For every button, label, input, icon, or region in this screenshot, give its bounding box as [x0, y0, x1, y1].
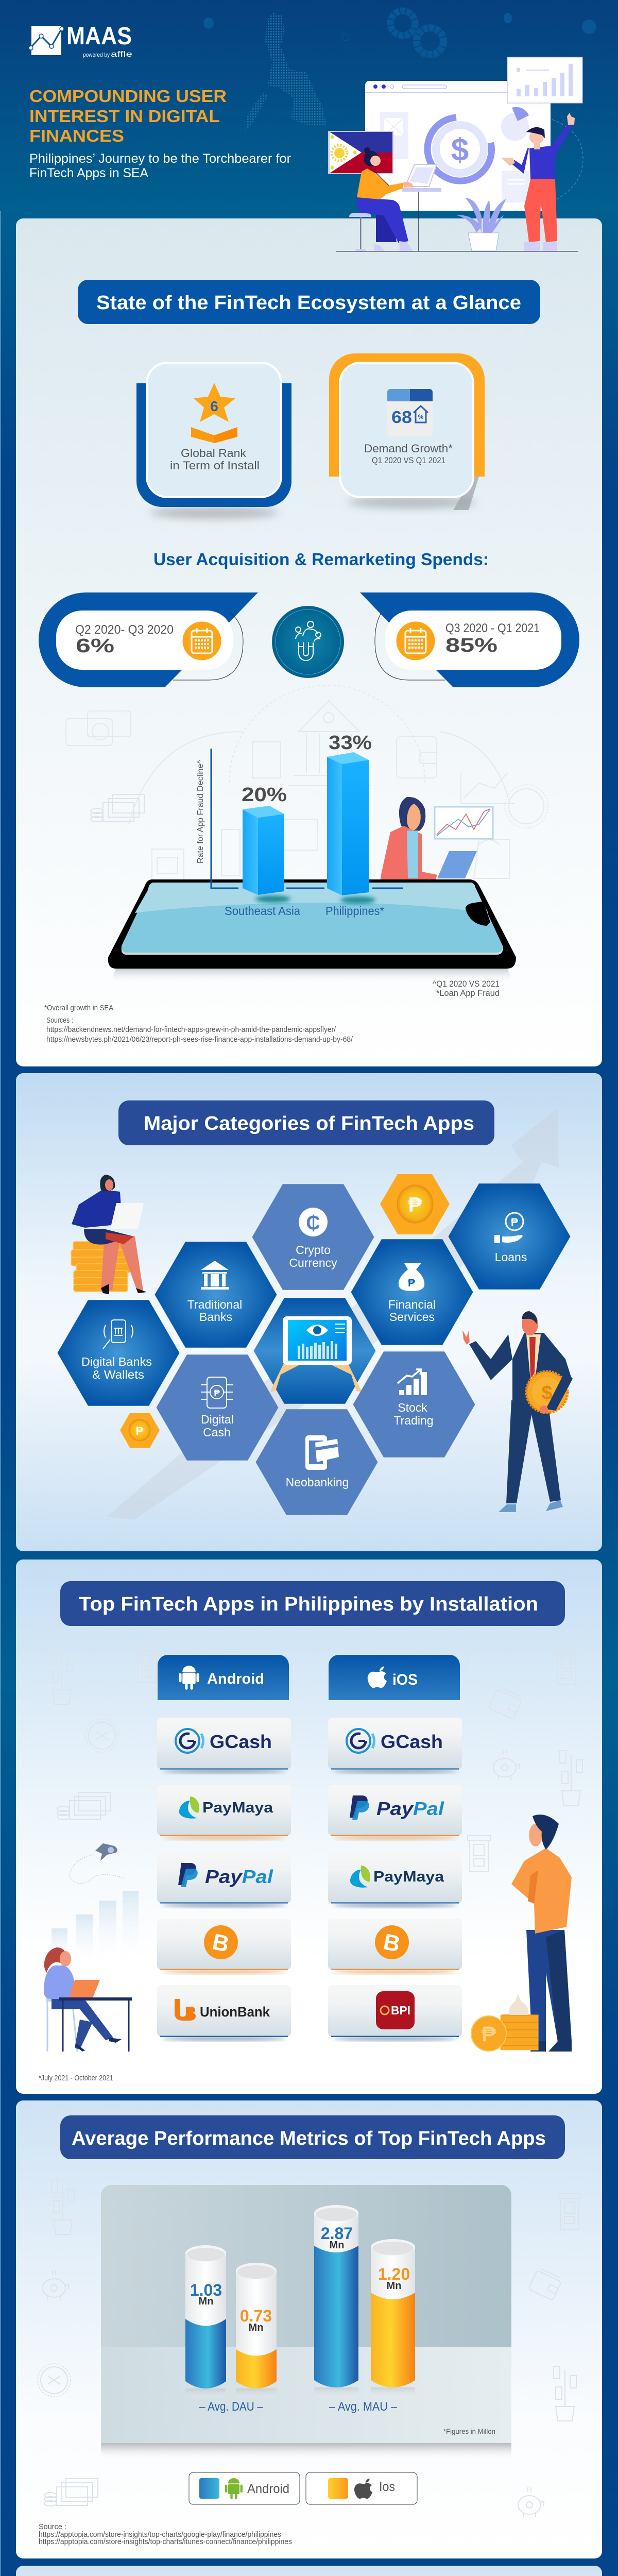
cylinder chart: – Avg. MAU –: [329, 2400, 398, 2414]
app card: GCash iOS: [328, 1718, 462, 1773]
heading: Top FinTech Apps in Philippines by Installation: [79, 1594, 538, 1615]
stat card: global rank: in Term of Install: [170, 459, 260, 472]
hexagon: financial services: ₱: [408, 1277, 415, 1289]
hexagon: neobanking: [255, 1409, 378, 1515]
decorative growth arrow: [107, 1108, 559, 1520]
stat card: global rank: [136, 363, 291, 519]
sources: https://newsbytes.ph/2021/06/23/report-ph-sees-rise-finance-app-installations-demand-up-by-68/: [46, 1036, 353, 1044]
presenting man: [501, 113, 575, 251]
legend: [189, 2472, 417, 2504]
hexagon: peso coin large: ₱: [408, 1194, 422, 1216]
hexagon: crypto currency: Crypto: [296, 1243, 331, 1257]
faint finance line art: [66, 685, 548, 880]
cylinder: DAU Android: Mn: [199, 2296, 213, 2307]
callout: Q3 2020 to Q1 2021 spend: 85%: [445, 635, 497, 656]
Philippine flag: [328, 131, 393, 174]
title: COMPOUNDING USER: [29, 87, 227, 106]
cylinder: DAU iOS: Mn: [249, 2322, 263, 2333]
browser window: [365, 81, 551, 211]
stat card: demand growth: [329, 353, 485, 510]
bar chart: fraud decline: Southeast Asia: [225, 904, 300, 918]
woman on coin stack: [71, 1175, 147, 1294]
axis label: Rate for App Fraud Decline^: [196, 760, 205, 863]
app card: GCash Android: [157, 1718, 291, 1773]
businessman with coin: [462, 1311, 573, 1512]
legend: Android: Android: [247, 2482, 289, 2496]
businessman with coin: $: [541, 1382, 553, 1404]
title: INTEREST IN DIGITAL: [29, 107, 220, 126]
app card: Bitcoin iOS: B: [381, 1929, 402, 1957]
axis lines: [211, 749, 403, 888]
hexagon: stock trading: Trading: [393, 1414, 434, 1427]
bar chart: fraud decline: 20%: [242, 784, 287, 806]
sources: [39, 2523, 292, 2546]
icon: calendar 68%: 68: [391, 408, 412, 427]
app card: PayPal Android: [157, 1852, 291, 1907]
callout: Q3 2020 to Q1 2021 spend: [360, 592, 579, 687]
hexagon: neobanking: Neobanking: [286, 1476, 349, 1489]
panel: top FinTech apps: [16, 1560, 602, 2094]
cylinder: DAU Android: 1.03: [190, 2281, 222, 2299]
title: FINANCES: [29, 126, 124, 145]
sources: Sources :: [46, 1016, 73, 1025]
logo: powered by: [83, 52, 110, 58]
hexagon: crypto currency: [252, 1184, 374, 1290]
hexagon: traditional banks: [154, 1242, 277, 1348]
man with peso coins: ₱: [482, 2022, 496, 2046]
bar chart: fraud decline: 33%: [329, 732, 372, 754]
hexagon: stock trading: Stock: [398, 1401, 427, 1414]
subtitle: FinTech Apps in SEA: [29, 166, 148, 180]
app card: Bitcoin Android: [157, 1919, 291, 1974]
bar chart card: [507, 57, 582, 103]
app card: UnionBank Android: [157, 1985, 291, 2041]
hexagon: digital cash: Cash: [203, 1426, 231, 1439]
panel: growth projection: [16, 2566, 602, 2576]
hexagon: loans: [448, 1183, 571, 1290]
browser window: $: [451, 132, 469, 168]
logo: [29, 23, 132, 59]
sources: https://backendnews.net/demand-for-fintech-apps-grew-in-ph-amid-the-pandemic-appsflyer/: [46, 1026, 336, 1034]
app card: PayPal iOS: PayPal: [376, 1798, 444, 1819]
heading: Average Performance Metrics of Top FinTech Apps: [72, 2128, 546, 2149]
app card: GCash iOS: GCash: [381, 1731, 443, 1752]
hexagon: traditional banks: Traditional: [187, 1298, 242, 1311]
hexagon: centre tablet with hands: [253, 1298, 376, 1404]
callout: Q2 to Q3 2020 spend: [39, 592, 258, 687]
cylinder chart: *Figures in Millon: [443, 2427, 495, 2435]
cylinder: DAU iOS: [236, 2263, 277, 2388]
stat card: demand growth: Demand Growth*: [364, 442, 453, 455]
chart notes: ^Q1 2020 VS 2021: [433, 979, 500, 989]
app card: Bitcoin iOS: [328, 1919, 462, 1974]
column header: Android: [158, 1655, 289, 1700]
header illustration: [328, 57, 583, 252]
hexagon: crypto currency: Currency: [289, 1256, 337, 1269]
bar chart: fraud decline: [108, 732, 516, 998]
app card: PayMaya iOS: PayMaya: [373, 1869, 444, 1885]
sources: [44, 1004, 353, 1044]
panel: average performance metrics: [16, 2100, 602, 2558]
seated woman at desk: [349, 147, 441, 252]
background map of the Philippines: [245, 13, 327, 131]
icon: calendar 68%: %: [418, 413, 424, 420]
column header: Android: Android: [207, 1671, 264, 1687]
logo: affle: [111, 50, 132, 59]
heading: Major Categories of FinTech Apps: [144, 1113, 474, 1134]
stat card: demand growth: Q1 2020 VS Q1 2021: [372, 456, 445, 465]
subtitle: Philippines’ Journey to be the Torchbearer for: [29, 151, 291, 166]
column header: iOS: [329, 1655, 460, 1700]
app card: PayMaya iOS: [328, 1852, 462, 1907]
cylinder: DAU iOS: 0.73: [240, 2307, 272, 2325]
column header: iOS: iOS: [392, 1671, 418, 1688]
heading: [78, 280, 540, 324]
app card: PayPal iOS: [328, 1785, 462, 1840]
callout: Q3 2020 to Q1 2021 spend: Q3 2020 - Q1 2021: [445, 621, 540, 635]
hexagon: crypto currency: ₵: [306, 1212, 320, 1234]
cylinder: MAU iOS: [371, 2239, 415, 2387]
cylinder: MAU Android: 2.87: [321, 2224, 353, 2243]
heading: [118, 1100, 494, 1145]
hexagon: loans: ₱: [511, 1216, 518, 1228]
subtitle: [29, 151, 291, 180]
hexagon: financial services: Financial: [388, 1298, 436, 1311]
hexagon: stock trading: [353, 1351, 475, 1458]
app card: UnionBank Android: UnionBank: [200, 2004, 270, 2020]
icon: star rank 6: [191, 383, 237, 443]
legend: Android: [189, 2472, 300, 2504]
hexagon: financial services: [351, 1239, 473, 1345]
cylinder: MAU Android: [314, 2205, 358, 2387]
chart notes: *Loan App Fraud: [436, 988, 500, 998]
stat card: global rank: Global Rank: [181, 447, 247, 460]
callout: Q2 to Q3 2020 spend: Q2 2020- Q3 2020: [75, 623, 174, 637]
icon: magnet attracting users: [272, 606, 344, 678]
hexagon: small peso coin: ₱: [136, 1425, 144, 1437]
man with peso coins: [471, 1815, 572, 2052]
hexagon: digital banks and wallets: [58, 1300, 179, 1406]
cylinder chart: – Avg. DAU –: [199, 2400, 264, 2414]
title: [29, 87, 227, 145]
hexagon: small peso coin: [120, 1413, 160, 1448]
app card: PayMaya Android: [157, 1785, 291, 1840]
icon: star rank 6: 6: [210, 398, 218, 414]
subheading: user acquisition and remarketing: User Acquisition & Remarketing Spends:: [153, 550, 489, 569]
app card: BPI iOS: [328, 1985, 462, 2041]
cylinder chart: [101, 2185, 511, 2460]
app card: BPI iOS: BPI: [391, 2004, 410, 2017]
heading: State of the FinTech Ecosystem at a Glance: [96, 292, 521, 314]
app card: Bitcoin Android: B: [210, 1929, 231, 1957]
decorative gears and dots: [203, 11, 596, 181]
hexagon: digital cash: [157, 1354, 278, 1461]
chart notes: [433, 979, 500, 998]
hexagon: digital banks and wallets: Digital Banks: [81, 1355, 152, 1368]
phone base: [108, 879, 516, 983]
woman with laptop and growth bars: [44, 1843, 139, 2052]
bar chart: fraud decline: Philippines*: [325, 904, 384, 918]
potted plant: [457, 198, 506, 251]
date note: *July 2021 - October 2021: [39, 2074, 113, 2082]
bar: Southeast Asia: [243, 806, 290, 903]
hexagon: digital cash: ₱: [214, 1388, 220, 1398]
sources: Source :: [39, 2523, 66, 2531]
hexagon: digital banks and wallets: & Wallets: [92, 1368, 144, 1381]
sources: https://apptopia.com/store-insights/top-charts/google-play/finance/philippines: [39, 2531, 281, 2539]
cylinder: MAU iOS: Mn: [387, 2280, 401, 2292]
sources: https://apptopia.com/store-insights/top-charts/itunes-connect/finance/philippines: [39, 2538, 292, 2546]
heading: [60, 2115, 565, 2159]
app card: PayPal Android: PayPal: [205, 1866, 273, 1887]
icon: calendar 68%: [387, 389, 433, 436]
heading: [60, 1581, 565, 1626]
panel: state of the FinTech ecosystem: [16, 218, 602, 1066]
hexagon: traditional banks: Banks: [199, 1310, 232, 1324]
bar: Philippines: [327, 752, 375, 904]
hexagon: peso coin large: [380, 1174, 450, 1234]
legend: iOS: Ios: [379, 2480, 395, 2494]
dashed arc behind presenter: [552, 120, 583, 199]
hexagon: loans: Loans: [495, 1250, 527, 1264]
cylinder: DAU Android: [185, 2245, 226, 2388]
logo: MAAS: [66, 23, 132, 50]
sources: *Overall growth in SEA: [44, 1004, 113, 1012]
header: [29, 11, 596, 181]
woman with laptop and chart: [381, 797, 493, 879]
callout: Q2 to Q3 2020 spend: 6%: [76, 635, 114, 657]
cylinder: MAU Android: Mn: [330, 2240, 344, 2251]
legend: iOS: [306, 2472, 417, 2504]
hexagon: digital cash: Digital: [201, 1413, 234, 1426]
app card: PayMaya Android: PayMaya: [202, 1800, 273, 1816]
hexagon: financial services: Services: [389, 1310, 435, 1324]
ground line: [336, 251, 578, 252]
cylinder: MAU iOS: 1.20: [378, 2265, 410, 2283]
panel: major categories: [16, 1073, 602, 1551]
app card: GCash Android: GCash: [210, 1731, 272, 1752]
